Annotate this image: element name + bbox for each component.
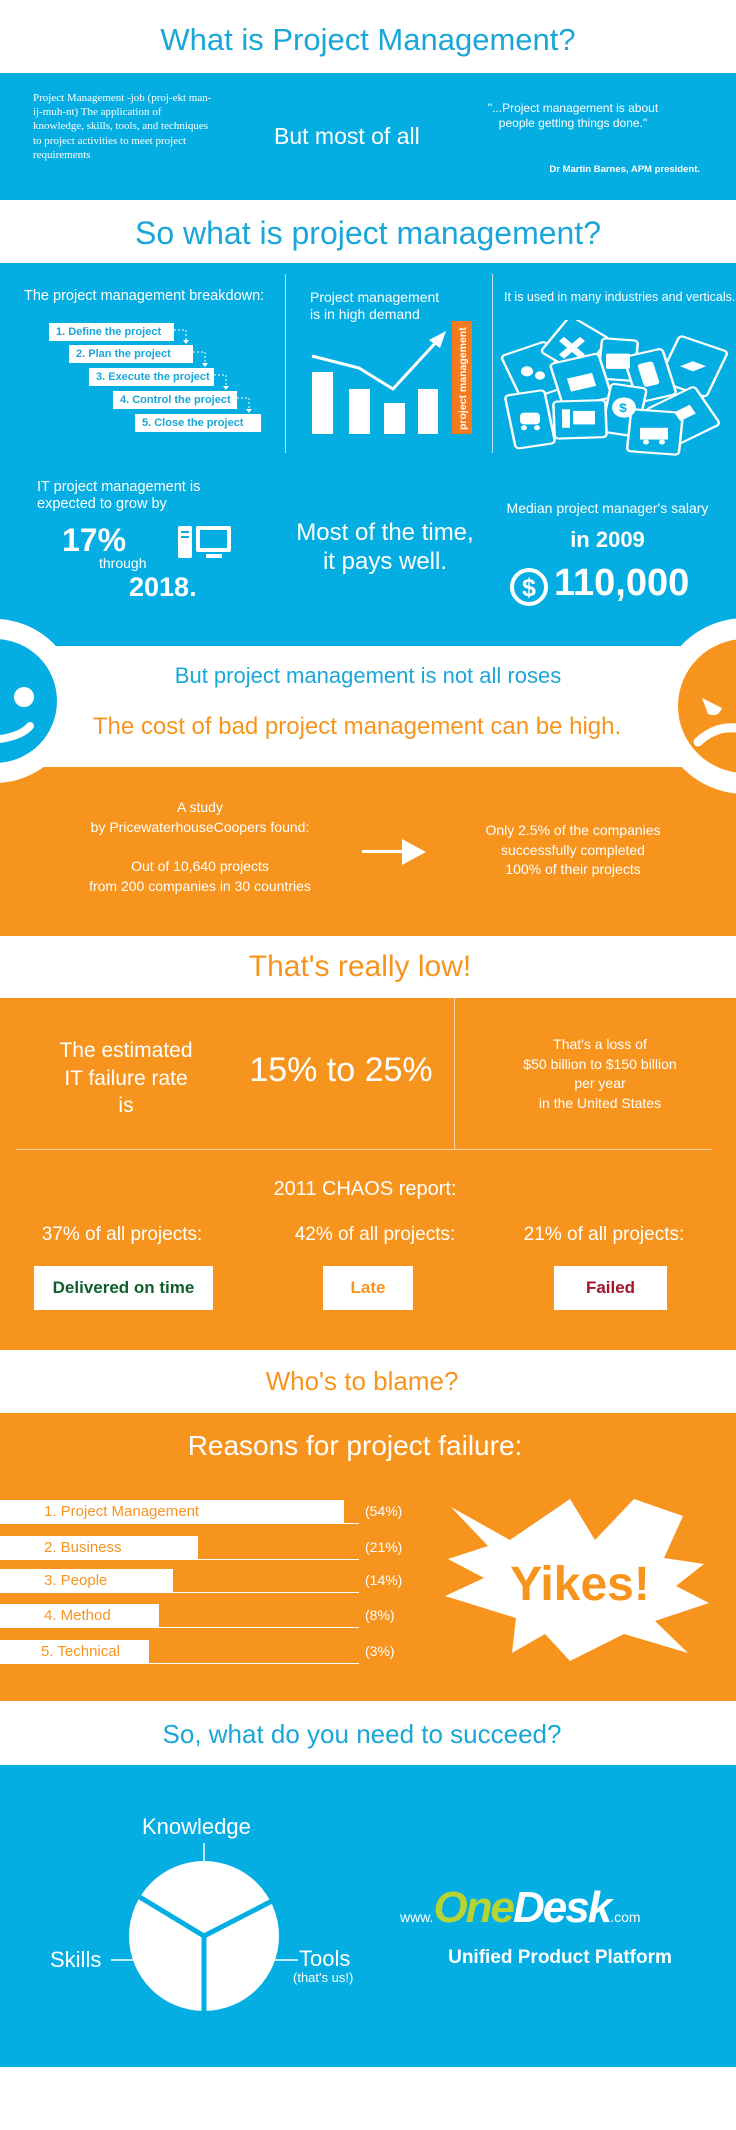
steps: 2. Plan the project <box>76 348 171 360</box>
loss text: $50 billion to $150 billion <box>523 1056 677 1072</box>
result text <box>485 822 661 877</box>
bar chart: project management <box>457 327 469 430</box>
in 2009: in 2009 <box>570 527 645 552</box>
icon: sad face <box>678 640 736 772</box>
through: through <box>99 555 146 571</box>
panel: salary: 110,000 <box>554 562 689 604</box>
panel: failure rate <box>0 998 736 1350</box>
chaos stat 1 <box>34 1224 213 1310</box>
loss text <box>523 1036 677 1110</box>
label: tools: Tools <box>299 1946 350 1971</box>
growth text <box>37 479 200 512</box>
bar chart: reasons: 3. People <box>44 1572 107 1589</box>
steps: 1. Define the project <box>56 326 161 338</box>
chaos stat 3 <box>524 1224 684 1310</box>
chaos stat 3: 21% of all projects: <box>524 1224 684 1245</box>
chaos stat 2: 42% of all projects: <box>295 1224 455 1245</box>
study text: from 200 companies in 30 countries <box>89 878 311 894</box>
bar chart: reasons: (54%) <box>365 1503 402 1519</box>
icon: computer <box>178 526 231 558</box>
chart heading <box>310 289 440 322</box>
panel: succeed <box>0 1765 736 2067</box>
panel: salary: $ <box>522 574 536 602</box>
bar chart <box>312 321 472 434</box>
17%: 17% <box>62 522 126 558</box>
starburst: yikes <box>445 1499 709 1661</box>
panel: breakdown <box>24 288 264 432</box>
industries text: It is used in many industries and verticals. <box>504 290 735 304</box>
chart heading: is in high demand <box>310 306 420 322</box>
reasons heading: Reasons for project failure: <box>188 1430 522 1461</box>
tagline: Unified Product Platform <box>448 1947 672 1968</box>
breakdown heading: The project management breakdown: <box>24 288 264 304</box>
heading: blame: Who's to blame? <box>266 1366 458 1396</box>
loss text: per year <box>574 1075 626 1091</box>
starburst: yikes: Yikes! <box>510 1558 650 1611</box>
title: What is Project Management? <box>160 22 576 57</box>
heading: really low: That's really low! <box>249 950 471 983</box>
quote author: Dr Martin Barnes, APM president. <box>549 164 700 175</box>
roses heading: But project management is not all roses <box>175 663 561 688</box>
failure text: The estimated <box>59 1039 193 1062</box>
failure text: IT failure rate <box>64 1066 188 1090</box>
growth text: expected to grow by <box>37 496 167 512</box>
panel: industries <box>500 290 735 456</box>
salary value <box>510 562 689 606</box>
bar chart: reasons: 5. Technical <box>41 1643 120 1660</box>
study text: by PricewaterhouseCoopers found: <box>91 819 309 835</box>
steps <box>49 323 261 432</box>
quote: "...Project management is about <box>488 101 658 115</box>
2018: 2018. <box>129 572 197 602</box>
quote <box>488 101 658 130</box>
chaos heading: 2011 CHAOS report: <box>273 1178 457 1200</box>
pays well <box>296 519 474 575</box>
label: tools <box>293 1946 353 1985</box>
salary label: Median project manager's salary <box>507 500 708 516</box>
steps: 3. Execute the project <box>96 371 210 383</box>
study text <box>89 799 311 894</box>
but most of all: But most of all <box>274 123 420 149</box>
chaos stat 2 <box>295 1224 455 1310</box>
pie chart: knowledge skills tools <box>111 1843 298 2011</box>
icon cluster <box>500 320 728 456</box>
bar chart: reasons: (3%) <box>365 1643 395 1659</box>
steps: 4. Control the project <box>120 394 231 406</box>
bar chart: reasons: 1. Project Management <box>44 1503 199 1520</box>
loss text: That's a loss of <box>553 1036 647 1052</box>
icon: happy face <box>0 639 57 763</box>
study text: Out of 10,640 projects <box>131 858 269 874</box>
heading 2: So what is project management? <box>135 215 601 251</box>
cost heading: The cost of bad project management can be high. <box>93 713 621 740</box>
failure percent: 15% to 25% <box>249 1051 433 1089</box>
definition text: Project Management -job (proj-ekt man-ij-muh-nt) The application of knowledge, skills, tools, and techniques to project activities to meet project requirements <box>33 92 211 161</box>
result text: successfully completed <box>501 842 645 858</box>
result text: Only 2.5% of the companies <box>485 822 661 838</box>
bar chart: reasons: (21%) <box>365 1539 402 1555</box>
result text: 100% of their projects <box>505 861 641 877</box>
panel: salary <box>507 500 708 606</box>
panel: definition band <box>0 73 736 200</box>
icon cluster: $ <box>619 401 628 415</box>
panel: reasons <box>0 1413 736 1701</box>
bar chart: reasons: 4. Method <box>44 1607 111 1624</box>
bar chart: reasons <box>0 1500 402 1664</box>
arrow <box>362 839 426 865</box>
chaos stat 3: Failed <box>586 1278 635 1297</box>
pays well: Most of the time, <box>296 519 474 546</box>
steps: 5. Close the project <box>142 417 243 429</box>
heading: succeed: So, what do you need to succeed? <box>163 1719 561 1749</box>
panel: what is PM blue band <box>0 263 736 648</box>
study text: A study <box>177 799 223 815</box>
chaos stat 1: 37% of all projects: <box>42 1224 202 1245</box>
growth text: IT project management is <box>37 479 200 495</box>
pays well: it pays well. <box>323 548 447 575</box>
label: tools: (that's us!) <box>293 1970 353 1985</box>
label: knowledge: Knowledge <box>142 1814 251 1839</box>
bar chart: reasons: (14%) <box>365 1572 402 1588</box>
bar chart: reasons: (8%) <box>365 1607 395 1623</box>
failure text <box>59 1039 193 1117</box>
logo: OneDesk: www.OneDesk.com <box>400 1883 641 1932</box>
panel: not all roses white band with faces <box>0 767 736 936</box>
panel: growth stat <box>37 479 231 602</box>
chaos stat 1: Delivered on time <box>53 1278 194 1297</box>
panel: high demand chart <box>310 289 472 434</box>
chart heading: Project management <box>310 289 439 305</box>
failure text: is <box>118 1094 134 1117</box>
dividers <box>285 274 286 453</box>
quote: people getting things done." <box>499 116 647 130</box>
bar chart: reasons: 2. Business <box>44 1539 122 1556</box>
loss text: in the United States <box>539 1094 661 1110</box>
label: skills: Skills <box>50 1947 101 1972</box>
chaos stat 2: Late <box>351 1278 385 1297</box>
